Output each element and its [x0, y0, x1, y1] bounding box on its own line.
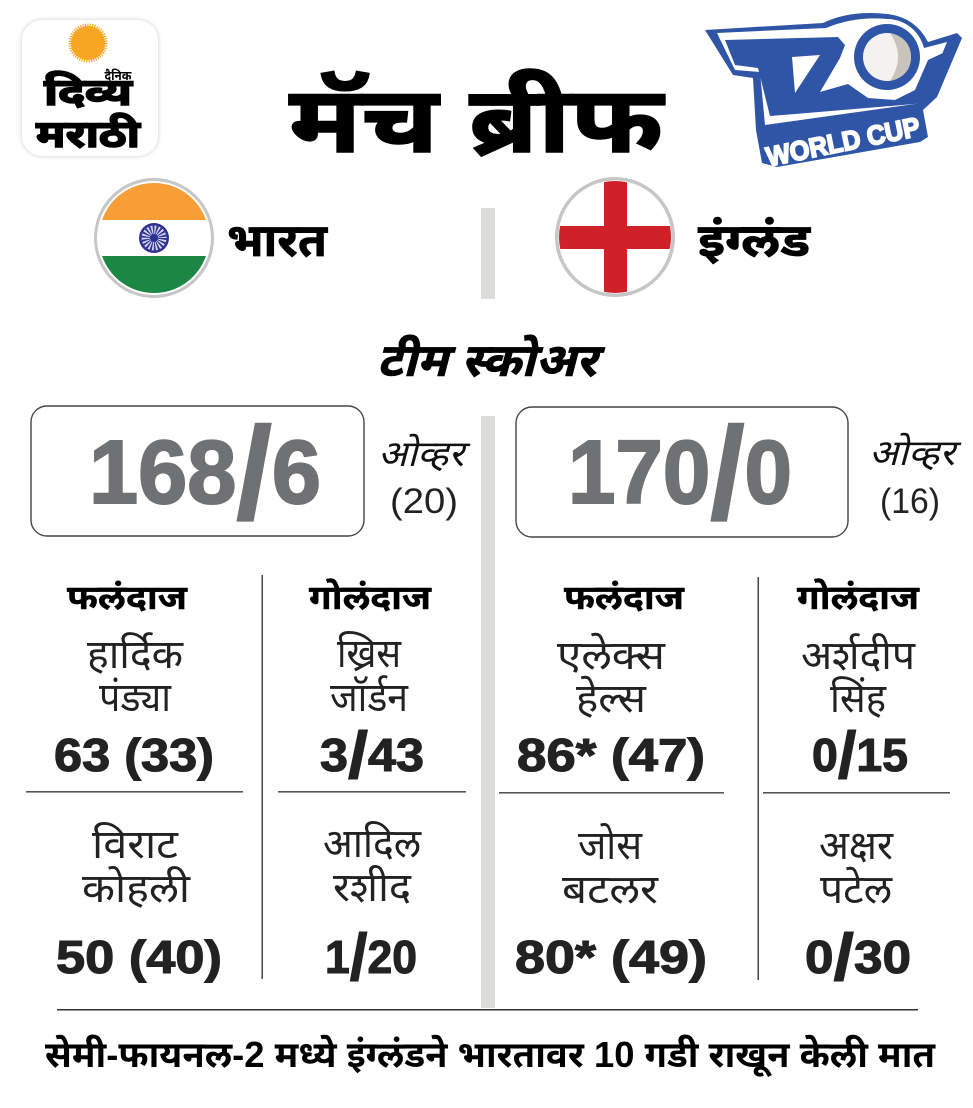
text: England overs: ओव्हर: [869, 432, 962, 473]
title: मॅच ब्रीफ: [289, 70, 665, 172]
divider: center: [481, 416, 495, 1008]
panel: India bowlers: /: [834, 920, 854, 994]
logo: Divya Marathi: [22, 20, 158, 156]
panel: England bowlers: जॉर्डन: [330, 675, 409, 720]
panel: England batters: एलेक्स: [557, 633, 666, 678]
heading: team score: टीम स्कोअर: [377, 334, 606, 386]
panel: England bowlers: /: [348, 718, 368, 792]
text: England overs: (16): [880, 482, 940, 521]
panel: India bowlers: सिंह: [830, 676, 887, 721]
panel: India bowlers: /: [838, 718, 856, 792]
panel: India bowlers: गोलंदाज: [797, 579, 920, 617]
panel: England bowlers: रशीद: [333, 865, 412, 910]
panel: India bowlers: पटेल: [820, 867, 893, 912]
panel: India bowlers: [797, 579, 920, 994]
panel: India batters: 63 (33): [54, 729, 214, 781]
panel: India bowlers: अर्शदीप: [801, 633, 916, 678]
panel: India score: 168: [89, 423, 239, 523]
panel: England score: 0: [745, 423, 792, 523]
panel: England bowlers: गोलंदाज: [309, 579, 432, 617]
panel: India score: [31, 400, 364, 546]
logo: Divya Marathi: दिव्य: [44, 70, 133, 114]
panel: India batters: फलंदाज: [67, 579, 188, 617]
panel: England score: [516, 400, 848, 546]
logo: T20 World Cup: [705, 13, 962, 172]
panel: England batters: फलंदाज: [564, 579, 685, 617]
panel: England bowlers: /: [350, 920, 368, 994]
panel: England bowlers: आदिल: [323, 821, 422, 866]
panel: India bowlers: 30: [854, 931, 911, 983]
panel: India batters: [54, 579, 222, 983]
panel: India bowlers: अक्षर: [819, 824, 894, 868]
panel: India batters: हार्दिक: [87, 632, 184, 677]
panel: England bowlers: ख्रिस: [337, 631, 402, 676]
text: India overs: ओव्हर: [378, 433, 471, 474]
text: England overs: [869, 432, 962, 521]
panel: England batters: हेल्स: [576, 676, 647, 721]
logo: Divya Marathi: दैनिक: [104, 68, 132, 83]
panel: England score: 170: [568, 423, 718, 523]
panel: England batters: बटलर: [562, 868, 659, 912]
panel: England bowlers: 3: [320, 729, 346, 781]
panel: India score: 6: [272, 423, 321, 523]
panel: England batters: 86* (47): [517, 729, 705, 781]
panel: India batters: कोहली: [82, 866, 191, 911]
panel: England score: /: [710, 400, 745, 546]
panel: England bowlers: [309, 579, 432, 994]
panel: India batters: पंड्या: [99, 676, 172, 720]
panel: England bowlers: 43: [368, 729, 424, 781]
footer: result: सेमी-फायनल-2 मध्ये इंग्लंडने भारतावर 10 गडी राखून केली मात: [45, 1033, 936, 1077]
panel: England batters: 80* (49): [515, 931, 707, 983]
label: India: भारत: [227, 214, 328, 266]
label: England: इंग्लंड: [698, 214, 811, 266]
panel: India bowlers: 0: [805, 931, 831, 983]
panel: England batters: जोस: [578, 823, 643, 868]
divider: header: [481, 208, 495, 299]
panel: England bowlers: 1: [325, 931, 351, 983]
panel: England bowlers: 20: [368, 931, 417, 983]
icon: India flag: [90, 178, 220, 298]
text: India overs: [378, 433, 471, 521]
logo: Divya Marathi: मराठी: [36, 112, 141, 156]
logo: T20 World Cup: WORLD CUP: [764, 112, 922, 172]
panel: India bowlers: 15: [856, 729, 908, 781]
panel: India score: /: [236, 400, 272, 546]
panel: England batters: [515, 579, 707, 983]
panel: India batters: विराट: [92, 822, 179, 867]
panel: India bowlers: 0: [812, 729, 838, 781]
icon: England flag: [555, 177, 675, 297]
text: India overs: (20): [390, 482, 458, 521]
panel: India batters: 50 (40): [56, 931, 222, 983]
